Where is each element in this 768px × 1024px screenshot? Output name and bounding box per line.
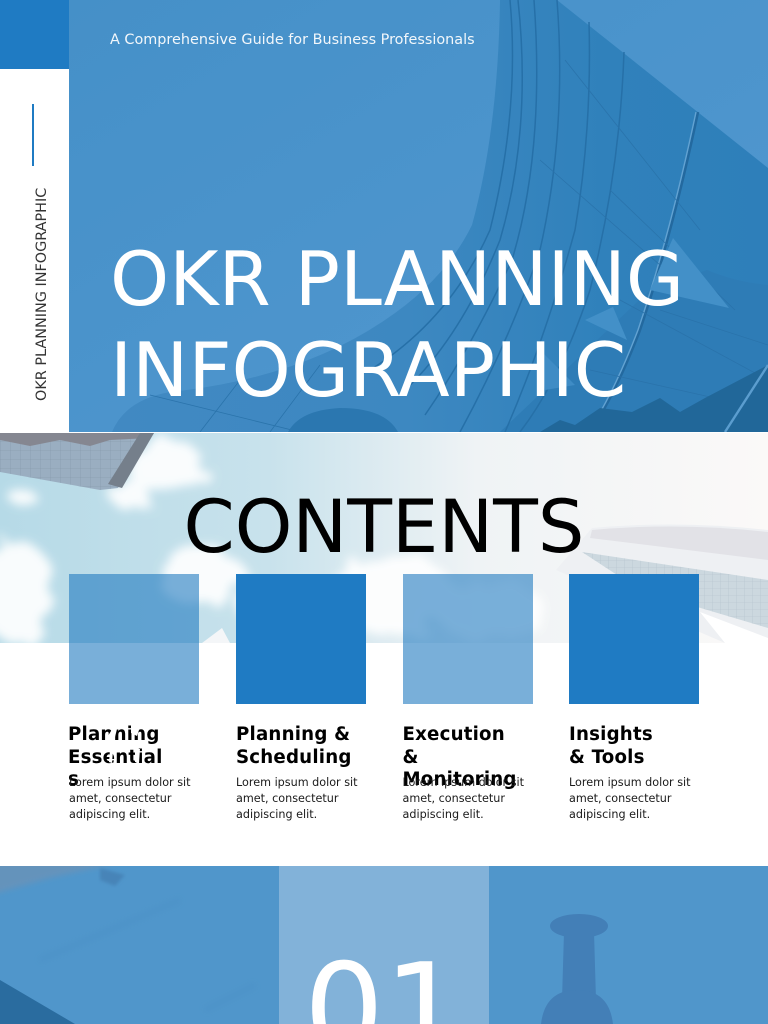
main title xyxy=(110,235,684,414)
main title: INFOGRAPHIC xyxy=(110,326,626,414)
card 1 square xyxy=(69,574,199,704)
icon: push pin xyxy=(541,914,613,1024)
card 2 heading: Scheduling xyxy=(236,746,352,768)
card 1 heading: Essential xyxy=(68,746,163,768)
card 2 heading: Planning & xyxy=(236,724,350,745)
top-left blue block xyxy=(0,0,69,69)
hero background with building xyxy=(69,0,768,432)
sidebar vertical label: OKR PLANNING INFOGRAPHIC xyxy=(34,188,50,401)
main title: OKR PLANNING xyxy=(110,235,684,323)
card 1 heading xyxy=(68,724,163,790)
sidebar accent line xyxy=(32,104,34,166)
section banner background xyxy=(0,866,768,1024)
card 1 heading: s xyxy=(68,769,79,790)
subtitle: A Comprehensive Guide for Business Professionals xyxy=(110,32,475,48)
card 2 body: Lorem ipsum dolor sit amet, consectetur adipiscing elit. xyxy=(236,776,358,821)
card 4 heading: & Tools xyxy=(569,746,645,768)
section number band xyxy=(279,866,489,1024)
card 1 heading cloud overlay xyxy=(108,726,140,763)
contents background photo xyxy=(0,433,768,643)
sidebar white panel xyxy=(0,69,69,432)
card 4 heading: Insights xyxy=(569,724,653,745)
card 3 body: Lorem ipsum dolor sit amet, consectetur adipiscing elit. xyxy=(402,776,524,821)
card 2 square xyxy=(236,574,366,704)
card 3 heading xyxy=(402,724,517,790)
card 4 square xyxy=(569,574,699,704)
card 2 heading xyxy=(236,724,352,768)
card 3 square xyxy=(402,574,532,704)
card 1 body: Lorem ipsum dolor sit amet, consectetur adipiscing elit. xyxy=(69,776,191,821)
contents heading: CONTENTS xyxy=(184,485,584,570)
card 3 heading: Execution xyxy=(402,724,505,745)
card 3 heading: & xyxy=(402,746,419,768)
card 4 heading xyxy=(569,724,653,768)
card 3 heading: Monitoring xyxy=(402,769,517,790)
card 4 body: Lorem ipsum dolor sit amet, consectetur adipiscing elit. xyxy=(569,776,691,821)
card 1 heading: Planning xyxy=(68,724,160,745)
